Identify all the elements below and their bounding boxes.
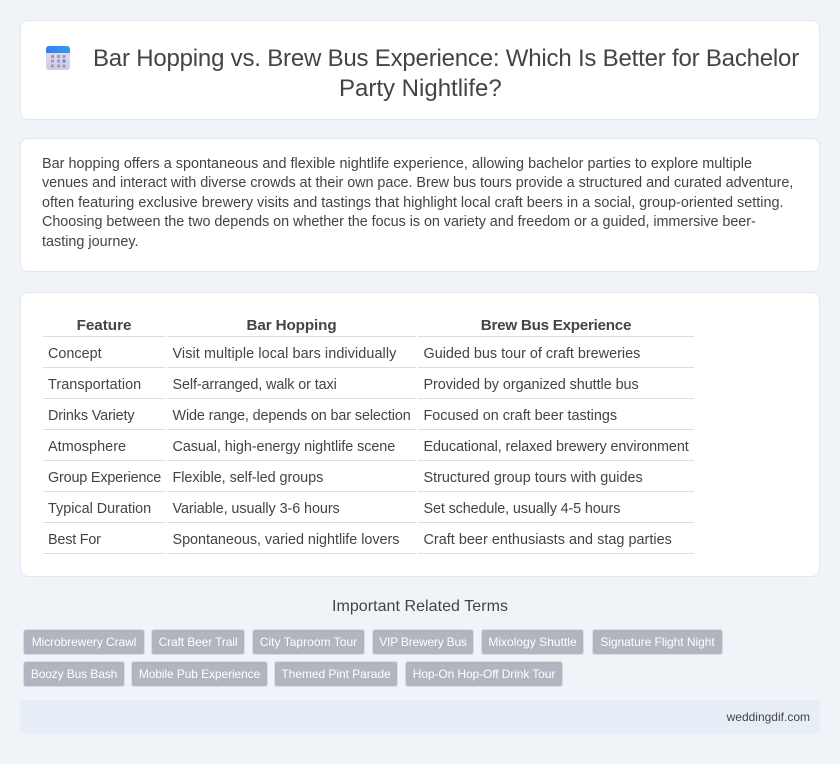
tags: related terms: Mobile Pub Experience [139, 667, 260, 681]
table row: Drinks Variety: Focused on craft beer tastings [424, 408, 617, 424]
table row: Group Experience: Structured group tours with guides [424, 470, 643, 486]
table row: Concept: Visit multiple local bars individually [172, 346, 396, 362]
panel: comparison table [20, 292, 820, 577]
table row: Atmosphere: Casual, high-energy nightlife scene [172, 439, 395, 455]
table row: Typical Duration: Set schedule, usually 4-5 hours [424, 501, 620, 517]
tags: related terms: Craft Beer Trail [159, 635, 237, 649]
title [93, 45, 799, 102]
text block: introduction: tasting journey. [42, 234, 139, 250]
tags: related terms: Microbrewery Crawl [32, 635, 136, 649]
table header: Feature [77, 317, 131, 334]
table header: Brew Bus Experience [481, 317, 631, 334]
tags: related terms: Themed Pint Parade [281, 667, 391, 681]
table row: Drinks Variety: Wide range, depends on bar selection [172, 408, 411, 424]
footer [20, 700, 820, 734]
table row: Best For: Spontaneous, varied nightlife lovers [172, 532, 399, 548]
table row: Best For: Best For [48, 532, 101, 548]
tags: related terms: Mixology Shuttle [488, 635, 577, 649]
table row: Typical Duration: Variable, usually 3-6 hours [172, 501, 340, 517]
tags: related terms: City Taproom Tour [260, 635, 357, 649]
title: Party Nightlife? [339, 75, 502, 102]
table row: Concept: Guided bus tour of craft breweries [424, 346, 640, 362]
table header [43, 317, 694, 337]
table row: Transportation: Self-arranged, walk or taxi [172, 377, 337, 393]
table row: Concept: Concept [48, 346, 102, 362]
text block: introduction: venues and interact with diverse crowds at their own pace. Brew bus tours provide a structured and curated adventure, [42, 175, 793, 191]
tags: related terms [23, 629, 723, 687]
panel: header [20, 20, 820, 120]
text block: introduction [42, 156, 793, 250]
table row: Typical Duration: Typical Duration [48, 501, 151, 517]
table row: Transportation: Provided by organized shuttle bus [424, 377, 639, 393]
footer source: weddingdif.com [727, 710, 810, 724]
table row: Best For: Craft beer enthusiasts and stag parties [424, 532, 672, 548]
tags: related terms: Hop-On Hop-Off Drink Tour [413, 667, 555, 681]
table row: Transportation: Transportation [48, 377, 141, 393]
table row: Drinks Variety: Drinks Variety [48, 408, 134, 424]
text block: introduction: Bar hopping offers a spontaneous and flexible nightlife experience, allowing bachelor parties to explore multiple [42, 156, 752, 172]
panel: introduction [20, 138, 820, 272]
table row: Best For [43, 532, 694, 554]
table row: Drinks Variety [43, 408, 694, 430]
table row: Atmosphere: Atmosphere [48, 439, 126, 455]
text block: introduction: often featuring exclusive brewery visits and tastings that highlight local craft beers in a social, group-oriented setting. [42, 195, 784, 211]
table row: Transportation [43, 377, 694, 399]
table header: Bar Hopping [246, 317, 337, 334]
tags: related terms: VIP Brewery Bus [379, 635, 467, 649]
text block: introduction: Choosing between the two depends on whether the focus is on variety and freedom or a guided, immersive beer- [42, 214, 756, 230]
heading: related terms: Important Related Terms [332, 598, 508, 615]
tags: related terms: Boozy Bus Bash [31, 667, 117, 681]
tags: related terms: Signature Flight Night [600, 635, 715, 649]
title: Bar Hopping vs. Brew Bus Experience: Which Is Better for Bachelor [93, 45, 799, 72]
table row: Concept [43, 346, 694, 368]
table row: Group Experience: Group Experience [48, 470, 161, 486]
table row: Atmosphere: Educational, relaxed brewery environment [424, 439, 689, 455]
icon: calendar [46, 46, 70, 70]
table row: Typical Duration [43, 501, 694, 523]
table row: Atmosphere [43, 439, 694, 461]
table row: Group Experience [43, 470, 694, 492]
table row: Group Experience: Flexible, self-led groups [172, 470, 323, 486]
